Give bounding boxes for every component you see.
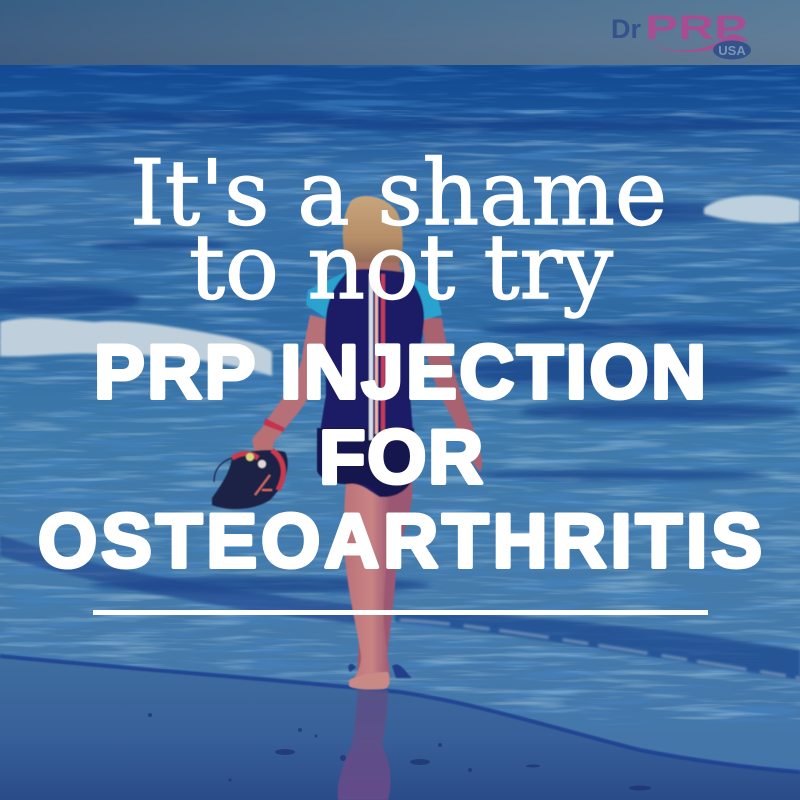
front leg xyxy=(344,480,390,684)
swimsuit shorts xyxy=(317,428,416,497)
shoreline foam xyxy=(400,620,800,678)
right sleeve xyxy=(400,272,442,320)
reflection in sand xyxy=(338,690,390,800)
hair xyxy=(343,196,403,268)
logo badge USA: USA xyxy=(718,43,746,58)
waterline xyxy=(0,656,800,772)
logo text Dr: Dr xyxy=(611,14,641,44)
left sleeve xyxy=(306,272,345,318)
headline line 1: It's a shame xyxy=(130,141,667,246)
sand pebbles xyxy=(148,713,651,790)
hand xyxy=(252,428,275,458)
logo: Dr PRP USA xyxy=(611,9,751,60)
foot xyxy=(349,672,390,690)
left arm xyxy=(256,315,330,447)
white foam: right wave xyxy=(704,195,800,224)
person walking on beach xyxy=(212,196,482,800)
neck xyxy=(352,262,402,272)
headline line 2: to not try xyxy=(189,215,613,320)
headline line 3: PRP INJECTION xyxy=(94,330,706,415)
red stripe xyxy=(381,274,385,434)
white foam: left wave xyxy=(0,318,272,376)
white stripe xyxy=(369,274,373,440)
water ripples light xyxy=(0,110,800,720)
divider rule xyxy=(93,610,708,615)
right arm xyxy=(422,318,482,472)
shoes held in hand xyxy=(212,450,288,509)
dark band above shore foam xyxy=(395,612,800,680)
water splash xyxy=(348,664,412,678)
dark wave bands xyxy=(0,112,800,593)
back leg xyxy=(358,480,413,672)
swimsuit torso xyxy=(317,269,424,497)
logo text PRP: PRP xyxy=(645,9,747,47)
logo swoosh xyxy=(650,34,748,52)
watch band xyxy=(264,418,285,432)
headline line 4: FOR xyxy=(319,415,483,500)
pink stripe xyxy=(375,274,378,434)
sky xyxy=(0,0,800,66)
shoreline dark water xyxy=(0,535,390,626)
headline xyxy=(38,141,762,584)
wet sand xyxy=(0,656,800,800)
headline line 5: OSTEOARTHRITIS xyxy=(38,499,762,584)
